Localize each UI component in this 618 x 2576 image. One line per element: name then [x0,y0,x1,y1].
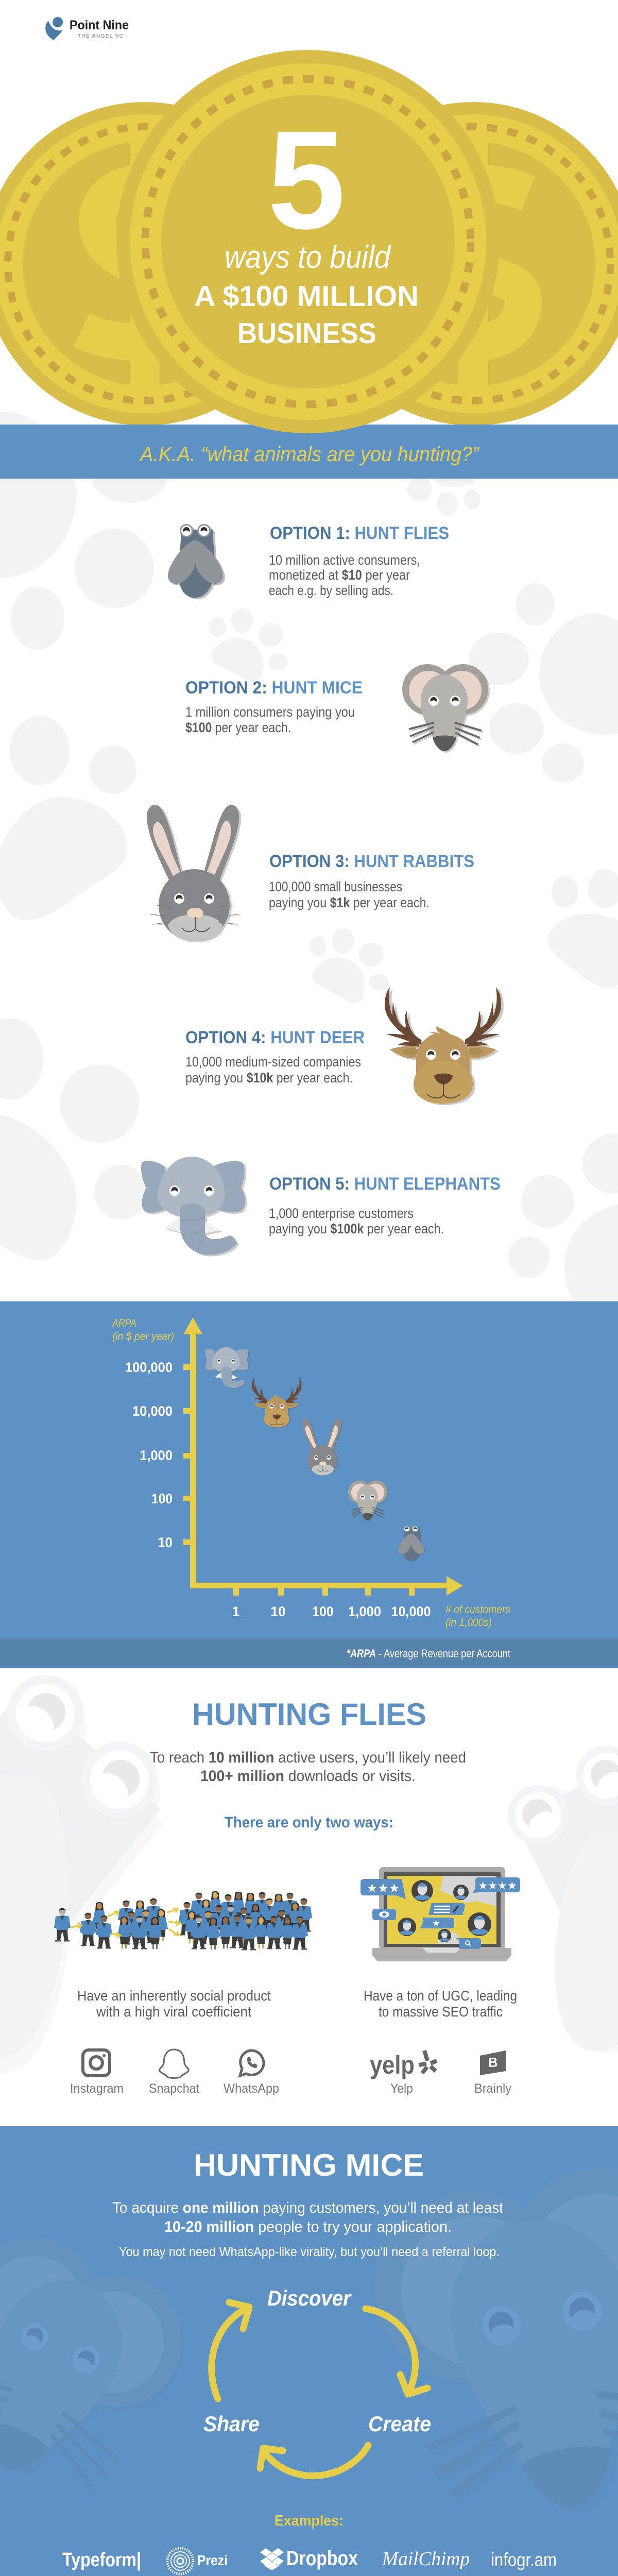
icon: Brainly [474,2050,511,2096]
panel: option 4: 10,000 medium-sized companies [185,1054,361,1070]
crowd arrows [71,1908,180,1938]
logos: example companies [62,2547,557,2574]
panel: centre coin with title: ways to build [225,240,391,275]
panel: option 5: paying you $100k per year each. [269,1221,444,1236]
panel: option 2: OPTION 2: HUNT MICE [185,678,363,698]
referral loop diagram: Share [203,2412,260,2436]
icon: Yelp: yelp [370,2050,415,2079]
panel: option 1: OPTION 1: HUNT FLIES [270,523,449,543]
loop arrows [212,2302,427,2476]
panel: hunting mice [0,2126,618,2576]
referral loop diagram: Create [368,2412,431,2436]
y axis labels: 10,000 [132,1403,173,1419]
way 2 caption: Have a ton of UGC, leading [364,1988,517,2004]
icon: Instagram [70,2050,124,2096]
examples label: Examples: [274,2513,344,2529]
icon: Instagram: Instagram [70,2081,124,2096]
way 1 caption [77,1988,271,2020]
x axis labels: 100 [312,1604,334,1619]
intro text: 10-20 million people to try your application. [164,2218,452,2235]
panel: centre coin with title: A $100 MILLION [194,280,419,313]
heading: HUNTING MICE [194,2148,424,2182]
fly watermarks [0,1614,618,2137]
panel: option 4 [185,987,501,1104]
icon: Yelp [370,2050,437,2096]
panel: option 1: 10 million active consumers, [269,552,420,568]
referral loop diagram: Discover [267,2286,352,2310]
laptop illustration: ★★★★ [478,1880,517,1892]
icon: Point Nine logo [45,17,129,40]
panel: option 5: OPTION 5: HUNT ELEPHANTS [269,1174,501,1194]
y axis title: (in $ per year) [112,1331,174,1343]
panel: subtitle band [0,425,618,479]
icon: Point Nine logo: Point Nine [70,18,129,32]
panel: hunting flies [0,1675,618,2095]
icon: WhatsApp: WhatsApp [224,2081,279,2096]
y axis labels: 100 [151,1491,173,1506]
panel: hunting rabbits [0,2538,618,2576]
panel: option 3 [147,805,474,941]
heading: HUNTING FLIES [192,1697,426,1732]
x axis labels [232,1604,431,1619]
x axis labels: 1 [232,1604,240,1619]
logos: example companies: infogr.am [491,2549,557,2570]
mouse watermarks [0,2153,618,2535]
intro text: To acquire one million paying customers, you’ll need at least [112,2199,504,2216]
x axis labels: 1,000 [348,1604,381,1619]
icon: Brainly: Brainly [474,2081,511,2096]
x axis labels: 10,000 [391,1604,431,1619]
laptop illustration: ★ [432,1918,440,1928]
panel: option 2: $100 per year each. [185,720,291,735]
panel: option 1 [168,523,449,598]
title: number 5: 5 [267,101,346,258]
panel: option 1: each e.g. by selling ads. [269,583,393,598]
rabbit watermarks [0,2538,618,2576]
icon: Yelp: Yelp [390,2081,413,2096]
panel: option 4: paying you $10k per year each. [185,1070,353,1086]
panel: option 3: paying you $1k per year each. [269,895,430,910]
icon: chart fly [398,1526,424,1561]
chart: ARPA versus number of customers [0,1301,618,1668]
panel: option 4: OPTION 4: HUNT DEER [185,1028,365,1047]
panel: option 5 [141,1157,501,1255]
y axis title [111,1317,174,1343]
x axis title: # of customers [445,1604,510,1616]
intro text: To reach 10 million active users, you’ll likely need [150,1749,466,1766]
panel: option 3: 100,000 small businesses [269,879,402,894]
y axis labels [125,1360,173,1550]
intro text: 100+ million downloads or visits. [200,1768,416,1785]
logos: example companies: Dropbox [286,2547,358,2570]
y axis labels: 10 [158,1535,173,1550]
intro text [150,1749,466,1785]
x axis labels: 10 [271,1604,285,1619]
crowd illustration [54,1891,312,1951]
icon: Snapchat [149,2049,199,2096]
y axis labels: 1,000 [140,1448,173,1463]
panel: subtitle band: A.K.A. “what animals are you hunting?” [139,443,480,466]
icon: chart mouse [348,1481,387,1520]
logos: example companies: Typeform| [62,2549,141,2571]
way 2 caption [364,1988,517,2020]
chart footnote: *ARPA - Average Revenue per Account [347,1647,510,1660]
intro text: You may not need WhatsApp-like virality, but you’ll need a referral loop. [119,2245,500,2259]
chart axes [183,1317,463,1596]
panel: option 5: 1,000 enterprise customers [269,1206,414,1221]
icon: chart elephant [205,1347,248,1388]
laptop illustration: ★★★ [367,1882,400,1895]
subheading: There are only two ways: [225,1814,393,1831]
way 1 caption: with a high viral coefficient [96,2004,251,2020]
panel: option 2 [185,664,488,751]
icon: chart deer [252,1378,301,1427]
panel: option 2: 1 million consumers paying you [185,704,355,720]
x axis title: (in 1,000s) [445,1617,492,1629]
intro text [112,2199,504,2259]
laptop illustration [360,1867,520,1961]
referral loop diagram [203,2286,431,2476]
panel: paw print background [0,412,618,1300]
logos: example companies: MailChimp [382,2548,470,2570]
panel: left coin [0,102,306,426]
panel: centre coin with title [116,50,500,433]
panel: right coin [312,102,618,426]
logos: example companies: Prezi [197,2552,228,2568]
panel: option 1: monetized at $10 per year [269,567,410,583]
icon: chart rabbit [303,1418,341,1476]
panel: option 3: OPTION 3: HUNT RABBITS [269,852,474,871]
icon: WhatsApp [224,2050,279,2096]
y axis title: ARPA [111,1317,136,1329]
way 2 caption: to massive SEO traffic [379,2004,503,2020]
panel: centre coin with title: BUSINESS [237,317,376,350]
icon: Point Nine logo: THE ANGEL VC [78,33,123,39]
y axis labels: 100,000 [125,1360,173,1375]
icon: Brainly: B [488,2055,497,2070]
x axis title [445,1604,510,1629]
icon: Snapchat: Snapchat [149,2081,199,2096]
way 1 caption: Have an inherently social product [77,1988,271,2004]
